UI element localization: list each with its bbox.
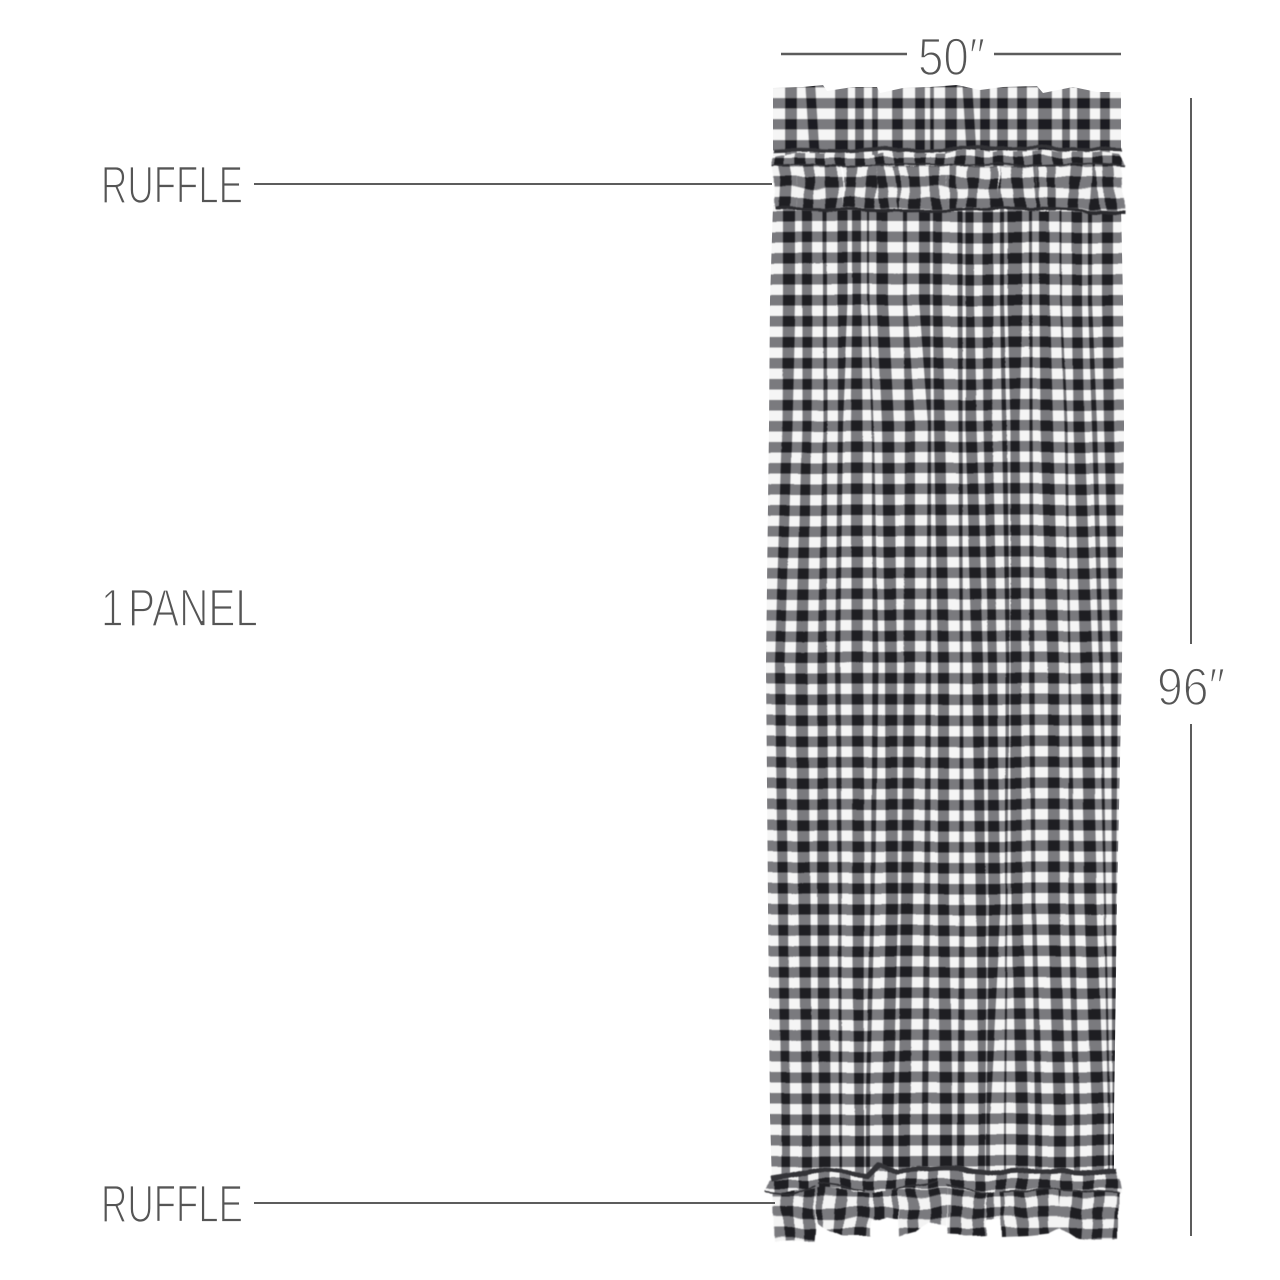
top ruffle frill [773, 150, 1126, 166]
label: top ruffle with leader line: RUFFLE [101, 156, 243, 215]
label: bottom ruffle with leader line: RUFFLE [101, 1175, 243, 1234]
label: one panel: 1 PANEL [101, 579, 258, 638]
dimension: height 96 inches: 96″ [1157, 658, 1225, 717]
curtain body gingham [766, 205, 1124, 1175]
bottom ruffle [764, 1165, 1120, 1242]
top ruffle [773, 148, 1126, 213]
bottom ruffle frill [764, 1166, 1120, 1194]
header rod pocket [773, 85, 1121, 156]
curtain panel photo [750, 75, 1140, 1242]
dimension: width 50 inches: 50″ [918, 28, 985, 87]
